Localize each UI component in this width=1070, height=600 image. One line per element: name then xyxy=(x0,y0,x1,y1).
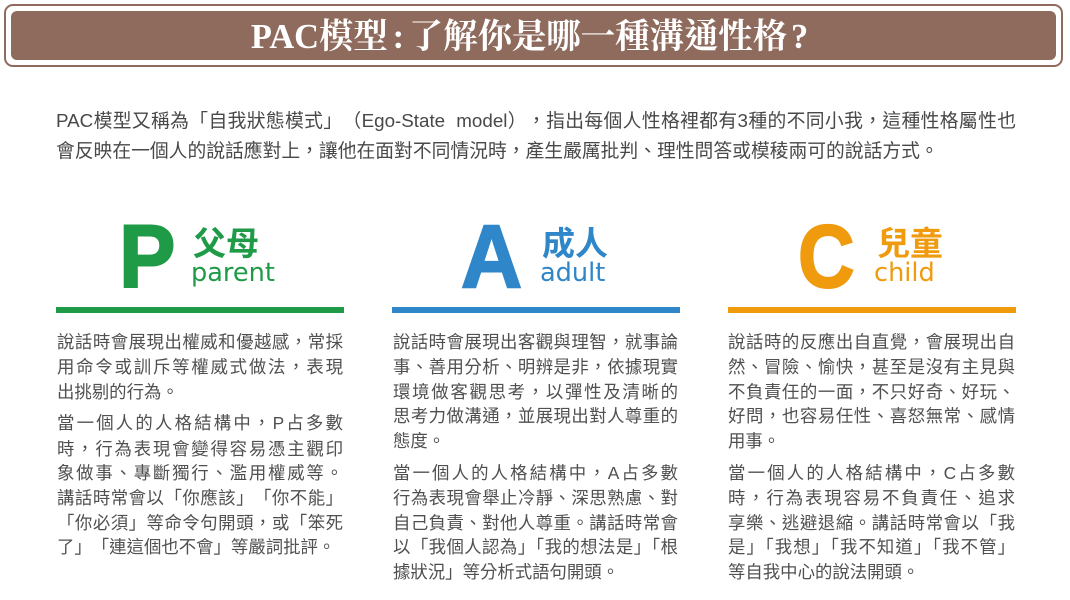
adult description: 態度。 xyxy=(393,431,445,451)
parent description: 了」「連這個也不會」等嚴詞批評。 xyxy=(57,537,335,557)
parent description: 當一個人的人格結構中，P占多數 xyxy=(57,413,343,433)
heading: child English: child xyxy=(874,258,935,288)
heading: parent English: parent xyxy=(191,258,275,288)
heading: : xyxy=(393,18,404,56)
child description: 然、冒險、愉快，甚至是沒有主見與 xyxy=(728,357,1015,377)
child description: 等自我中心的說法開頭。 xyxy=(728,562,919,582)
parent description: 講話時常會以「你應該」「你不能」 xyxy=(57,488,343,508)
adult description: 據狀況」等分析式語句開頭。 xyxy=(393,562,619,582)
adult description: 環境做客觀思考，以彈性及清晰的 xyxy=(393,382,678,402)
heading: ? xyxy=(791,18,808,56)
intro text block: PAC模型又稱為「自我狀態模式」（Ego-State model），指出每個人性格裡都有3種的不同小我，這種性格屬性也 xyxy=(56,110,1016,131)
icon: letter C: C xyxy=(798,206,855,306)
parent description: 時，行為表現會變得容易憑主觀印 xyxy=(57,439,343,459)
heading: parent Chinese: 父母 xyxy=(193,225,259,262)
parent rule xyxy=(56,307,344,313)
parent description: 說話時會展現出權威和優越感，常採 xyxy=(57,332,343,352)
intro text block: 會反映在一個人的說話應對上，讓他在面對不同情況時，產生嚴厲批判、理性問答或模稜兩可的說話方式。 xyxy=(56,140,939,161)
icon: letter A: A xyxy=(461,206,522,306)
heading: adult English: adult xyxy=(540,258,605,288)
parent description: 用命令或訓斥等權威式做法，表現 xyxy=(57,357,343,377)
parent description: 出挑剔的行為。 xyxy=(57,382,179,402)
adult description: 說話時會展現出客觀與理智，就事論 xyxy=(393,332,678,352)
banner fill xyxy=(11,11,1056,60)
adult description: 自己負責、對他人尊重。講話時常會 xyxy=(393,513,678,533)
heading: PAC模型 了解你是哪一種溝通性格 xyxy=(251,18,787,56)
child description: 當一個人的人格結構中，C占多數 xyxy=(728,463,1015,483)
child description: 用事。 xyxy=(728,431,780,451)
child description: 好問，也容易任性、喜怒無常、感情 xyxy=(728,406,1015,426)
adult description: 思考力做溝通，並展現出對人尊重的 xyxy=(393,406,678,426)
adult rule xyxy=(392,307,680,313)
icon: letter P: P xyxy=(119,206,175,306)
title banner xyxy=(4,4,1063,67)
child description: 時，行為表現容易不負責任、追求 xyxy=(728,488,1015,508)
child rule xyxy=(728,307,1016,313)
parent description: 象做事、專斷獨行、濫用權威等。 xyxy=(57,463,343,483)
child description: 享樂、逃避退縮。講話時常會以「我 xyxy=(728,513,1015,533)
child description: 是」「我想」「我不知道」「我不管」 xyxy=(728,537,1015,557)
child description: 不負責任的一面，不只好奇、好玩、 xyxy=(728,382,1015,402)
heading: adult Chinese: 成人 xyxy=(542,225,608,262)
intro text block xyxy=(56,110,1016,161)
adult description: 事、善用分析、明辨是非，依據現實 xyxy=(393,357,678,377)
parent description: 「你必須」等命令句開頭，或「笨死 xyxy=(57,513,343,533)
adult description: 行為表現會舉止冷靜、深思熟慮、對 xyxy=(393,488,678,508)
banner outer frame xyxy=(4,4,1063,67)
adult description: 以「我個人認為」「我的想法是」「根 xyxy=(393,537,678,557)
child description: 說話時的反應出自直覺，會展現出自 xyxy=(728,332,1015,352)
heading: child Chinese: 兒童 xyxy=(877,225,943,262)
